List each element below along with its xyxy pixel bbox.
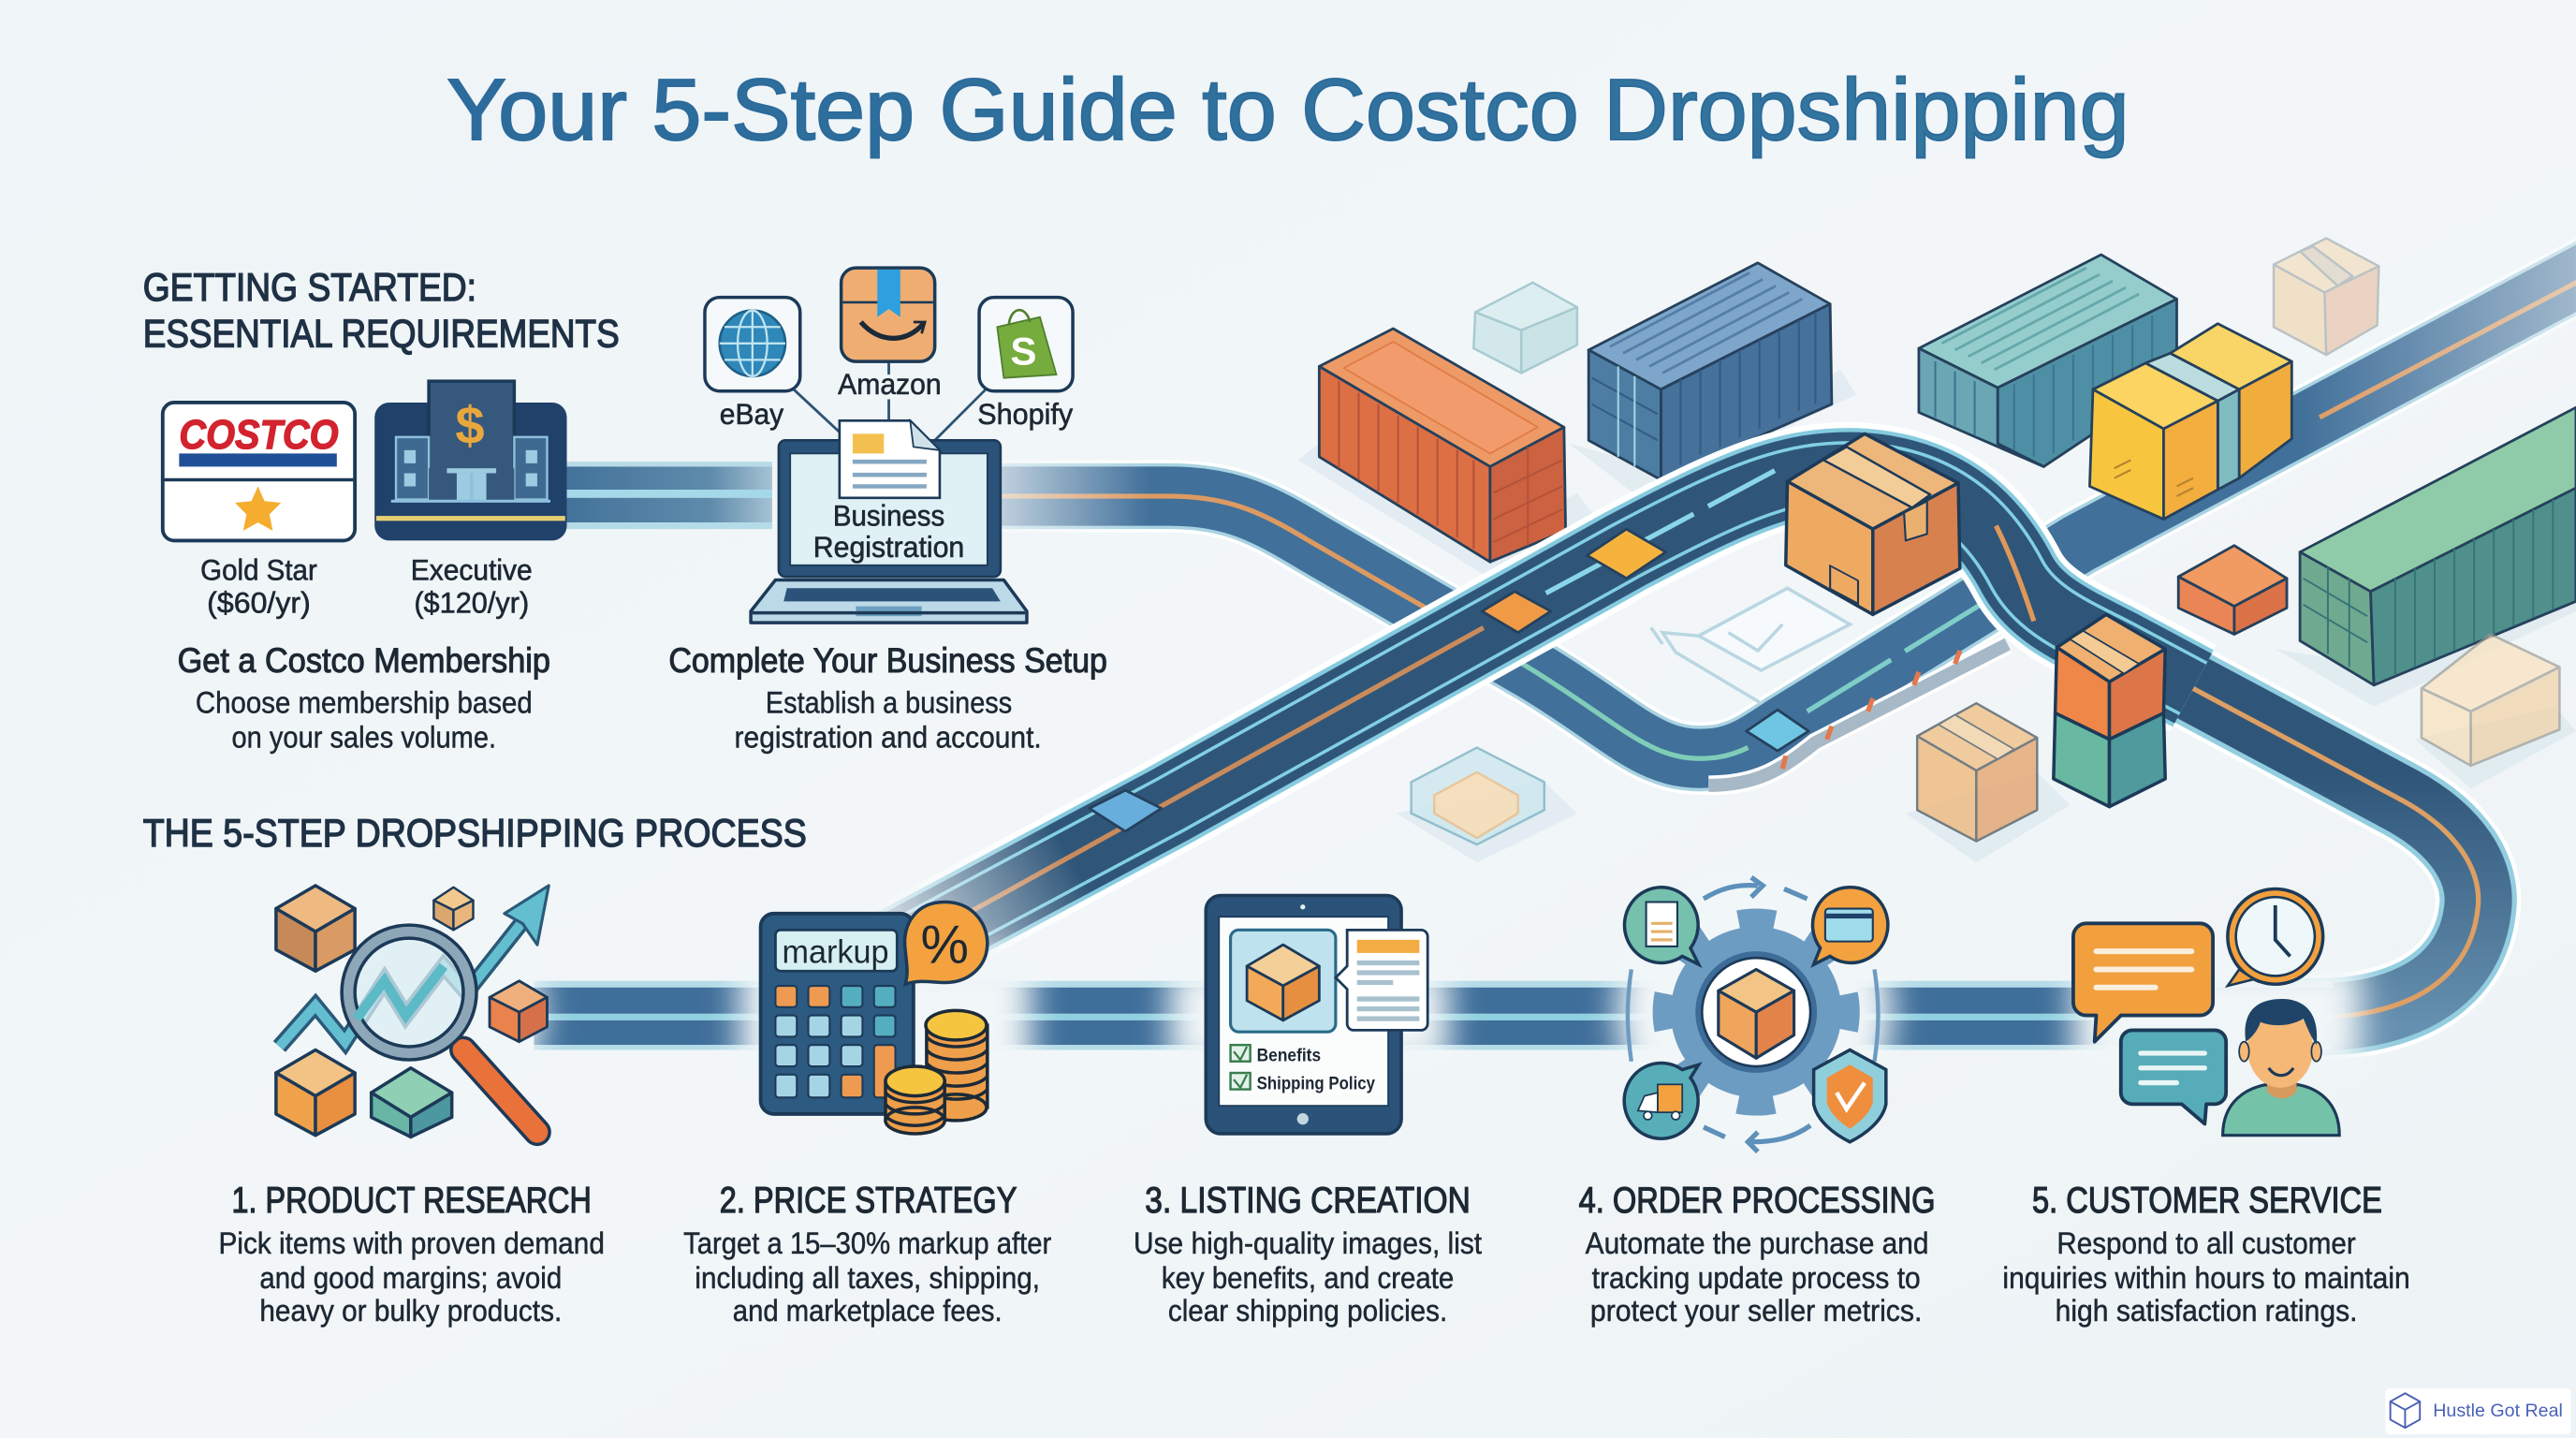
icon: truck bubble	[1624, 1063, 1699, 1138]
label: ebay: eBay	[720, 397, 783, 431]
icon: growth arrow	[279, 886, 549, 1047]
text: business registration: Registration	[813, 530, 964, 564]
container: green	[2300, 407, 2576, 685]
label: amazon: Amazon	[838, 367, 942, 401]
text: business registration	[813, 499, 964, 564]
icon: shopify: S	[1010, 330, 1036, 374]
step 1: product research	[218, 886, 605, 1328]
heading: getting started	[143, 265, 620, 355]
cube: pale tan right	[2422, 634, 2559, 766]
text: membership: on your sales volume.	[232, 721, 496, 755]
icon: costco card	[163, 403, 355, 540]
icon: amazon	[842, 268, 935, 361]
checkbox: benefits: Benefits	[1257, 1047, 1321, 1066]
text: step 2: Target a 15–30% markup after	[683, 1226, 1051, 1260]
icon: clock	[2228, 888, 2323, 986]
text: step 3: clear shipping policies.	[1168, 1294, 1447, 1328]
text: business setup: registration and account.	[735, 721, 1042, 755]
text: step 3: Use high-quality images, list	[1134, 1226, 1482, 1260]
text: step 4: Automate the purchase and	[1586, 1226, 1928, 1260]
text: business setup: Establish a business	[766, 686, 1012, 720]
road: lower ticked strand	[1708, 644, 2008, 785]
container: teal	[1919, 255, 2176, 466]
text: step 2: including all taxes, shipping,	[695, 1261, 1040, 1295]
icon: executive building: $	[455, 396, 485, 455]
step 2: price strategy	[683, 902, 1051, 1328]
label: gold star: Gold Star	[200, 553, 317, 587]
label: shopify: Shopify	[977, 397, 1073, 431]
label: gold star	[200, 553, 317, 620]
step 4: order processing	[1579, 877, 1935, 1328]
icon: tablet	[1206, 895, 1427, 1134]
text: business setup: Complete Your Business Setup	[668, 641, 1107, 680]
text: membership	[178, 641, 550, 755]
checkbox: shipping policy	[1231, 1073, 1375, 1094]
icon: gear	[1628, 902, 1878, 1123]
icon: percent bubble	[905, 902, 988, 984]
text: step 4	[1586, 1226, 1928, 1328]
parcel: orange	[1482, 592, 1551, 633]
text: business registration: Business	[833, 499, 944, 533]
icon: shield	[1814, 1049, 1886, 1142]
checkbox: benefits	[1231, 1045, 1321, 1066]
cube: bottom left pale	[1412, 748, 1544, 844]
parcel: blue lower	[1090, 790, 1162, 831]
icon: ebay	[705, 298, 800, 391]
panel: business setup	[668, 268, 1107, 755]
parcel: yellow	[1587, 529, 1666, 579]
icon: calculator	[761, 914, 914, 1114]
icon: card bubble	[1812, 888, 1888, 964]
icon: costco card: COSTCO	[179, 412, 339, 458]
label: executive	[411, 553, 533, 620]
icon: cycle arrows	[1704, 877, 1810, 1152]
cube: stacked orange and teal	[2054, 614, 2165, 807]
text: membership: Choose membership based	[196, 686, 533, 720]
road: main diagonal route	[788, 468, 2193, 1009]
text: step 2: and marketplace fees.	[733, 1294, 1003, 1328]
panel: membership	[163, 381, 567, 755]
icon: research	[276, 886, 547, 1137]
text: step 5: Respond to all customer	[2056, 1226, 2356, 1260]
text: step 5: inquiries within hours to maintain	[2002, 1261, 2410, 1295]
text: step 4: tracking update process to	[1592, 1261, 1921, 1295]
label: executive: ($120/yr)	[414, 586, 529, 620]
pale pallet outline on the ground	[1651, 588, 1850, 703]
package: main	[1786, 433, 1960, 614]
icon: percent bubble: %	[920, 915, 969, 975]
road: back route	[986, 268, 2576, 758]
step 5: customer service	[2002, 888, 2410, 1328]
heading: step 5: 5. CUSTOMER SERVICE	[2032, 1181, 2382, 1221]
container: orange	[1319, 329, 1566, 562]
heading: getting started: ESSENTIAL REQUIREMENTS	[143, 311, 620, 355]
connectors	[792, 361, 986, 440]
text: step 1: and good margins; avoid	[259, 1261, 562, 1295]
road: setup connector between membership and laptop	[567, 462, 772, 529]
heading: step 1: 1. PRODUCT RESEARCH	[232, 1181, 592, 1221]
heading: step 4: 4. ORDER PROCESSING	[1579, 1181, 1935, 1221]
heading: step 3: 3. LISTING CREATION	[1145, 1181, 1471, 1221]
icon: coins	[886, 1010, 988, 1134]
text: step 1: Pick items with proven demand	[218, 1226, 605, 1260]
text: step 1	[218, 1226, 605, 1328]
glow behind step icons	[279, 874, 2361, 1151]
icon: calculator: markup	[782, 933, 889, 970]
heading: process: THE 5-STEP DROPSHIPPING PROCESS	[143, 811, 807, 855]
heading: getting started: GETTING STARTED:	[143, 265, 476, 309]
cube: tan bottom centre	[1917, 703, 2037, 842]
text: membership: Get a Costco Membership	[178, 641, 550, 680]
text: step 5	[2002, 1226, 2410, 1328]
icon: laptop	[751, 420, 1027, 623]
icon: teal chat bubble	[2121, 1030, 2226, 1123]
checkbox: shipping policy: Shipping Policy	[1257, 1075, 1375, 1094]
cube: pale teal	[1473, 283, 1577, 373]
parcel: blue	[1747, 710, 1808, 751]
shadows under containers	[1298, 370, 2576, 862]
icon: paper	[840, 420, 940, 498]
text: step 2	[683, 1226, 1051, 1328]
watermark logo: Hustle Got Real	[2433, 1401, 2563, 1421]
icon: orange chat bubble	[2073, 923, 2213, 1042]
road: left fade of back route	[994, 457, 1150, 536]
text: step 5: high satisfaction ratings.	[2056, 1294, 2358, 1328]
icon: shopify	[979, 298, 1073, 391]
road: arc to the process line	[2169, 675, 2479, 1017]
text: step 4: protect your seller metrics.	[1590, 1294, 1922, 1328]
cube: small orange right	[2178, 546, 2287, 634]
icon: document bubble	[1624, 888, 1699, 964]
title: Your 5-Step Guide to Costco Dropshipping	[446, 61, 2130, 158]
text: step 3	[1134, 1226, 1482, 1328]
boxes: yellow pair	[2089, 324, 2291, 520]
text: step 1: heavy or bulky products.	[259, 1294, 562, 1328]
icon: magnifier	[342, 925, 537, 1132]
watermark logo	[2385, 1388, 2571, 1434]
heading: step 2: 2. PRICE STRATEGY	[720, 1181, 1017, 1221]
label: gold star: ($60/yr)	[207, 586, 311, 620]
document callout	[1336, 930, 1427, 1030]
cube: faint tan top right	[2274, 238, 2378, 355]
container: blue	[1588, 263, 1832, 479]
road: horizontal process connector	[534, 981, 2333, 1049]
parcels on road	[1090, 529, 1808, 831]
text: business setup	[668, 641, 1107, 755]
icon: executive building	[374, 381, 567, 540]
step 3: listing creation	[1134, 895, 1482, 1328]
icon: person	[2223, 999, 2339, 1136]
text: step 3: key benefits, and create	[1162, 1261, 1454, 1295]
label: executive: Executive	[411, 553, 533, 587]
